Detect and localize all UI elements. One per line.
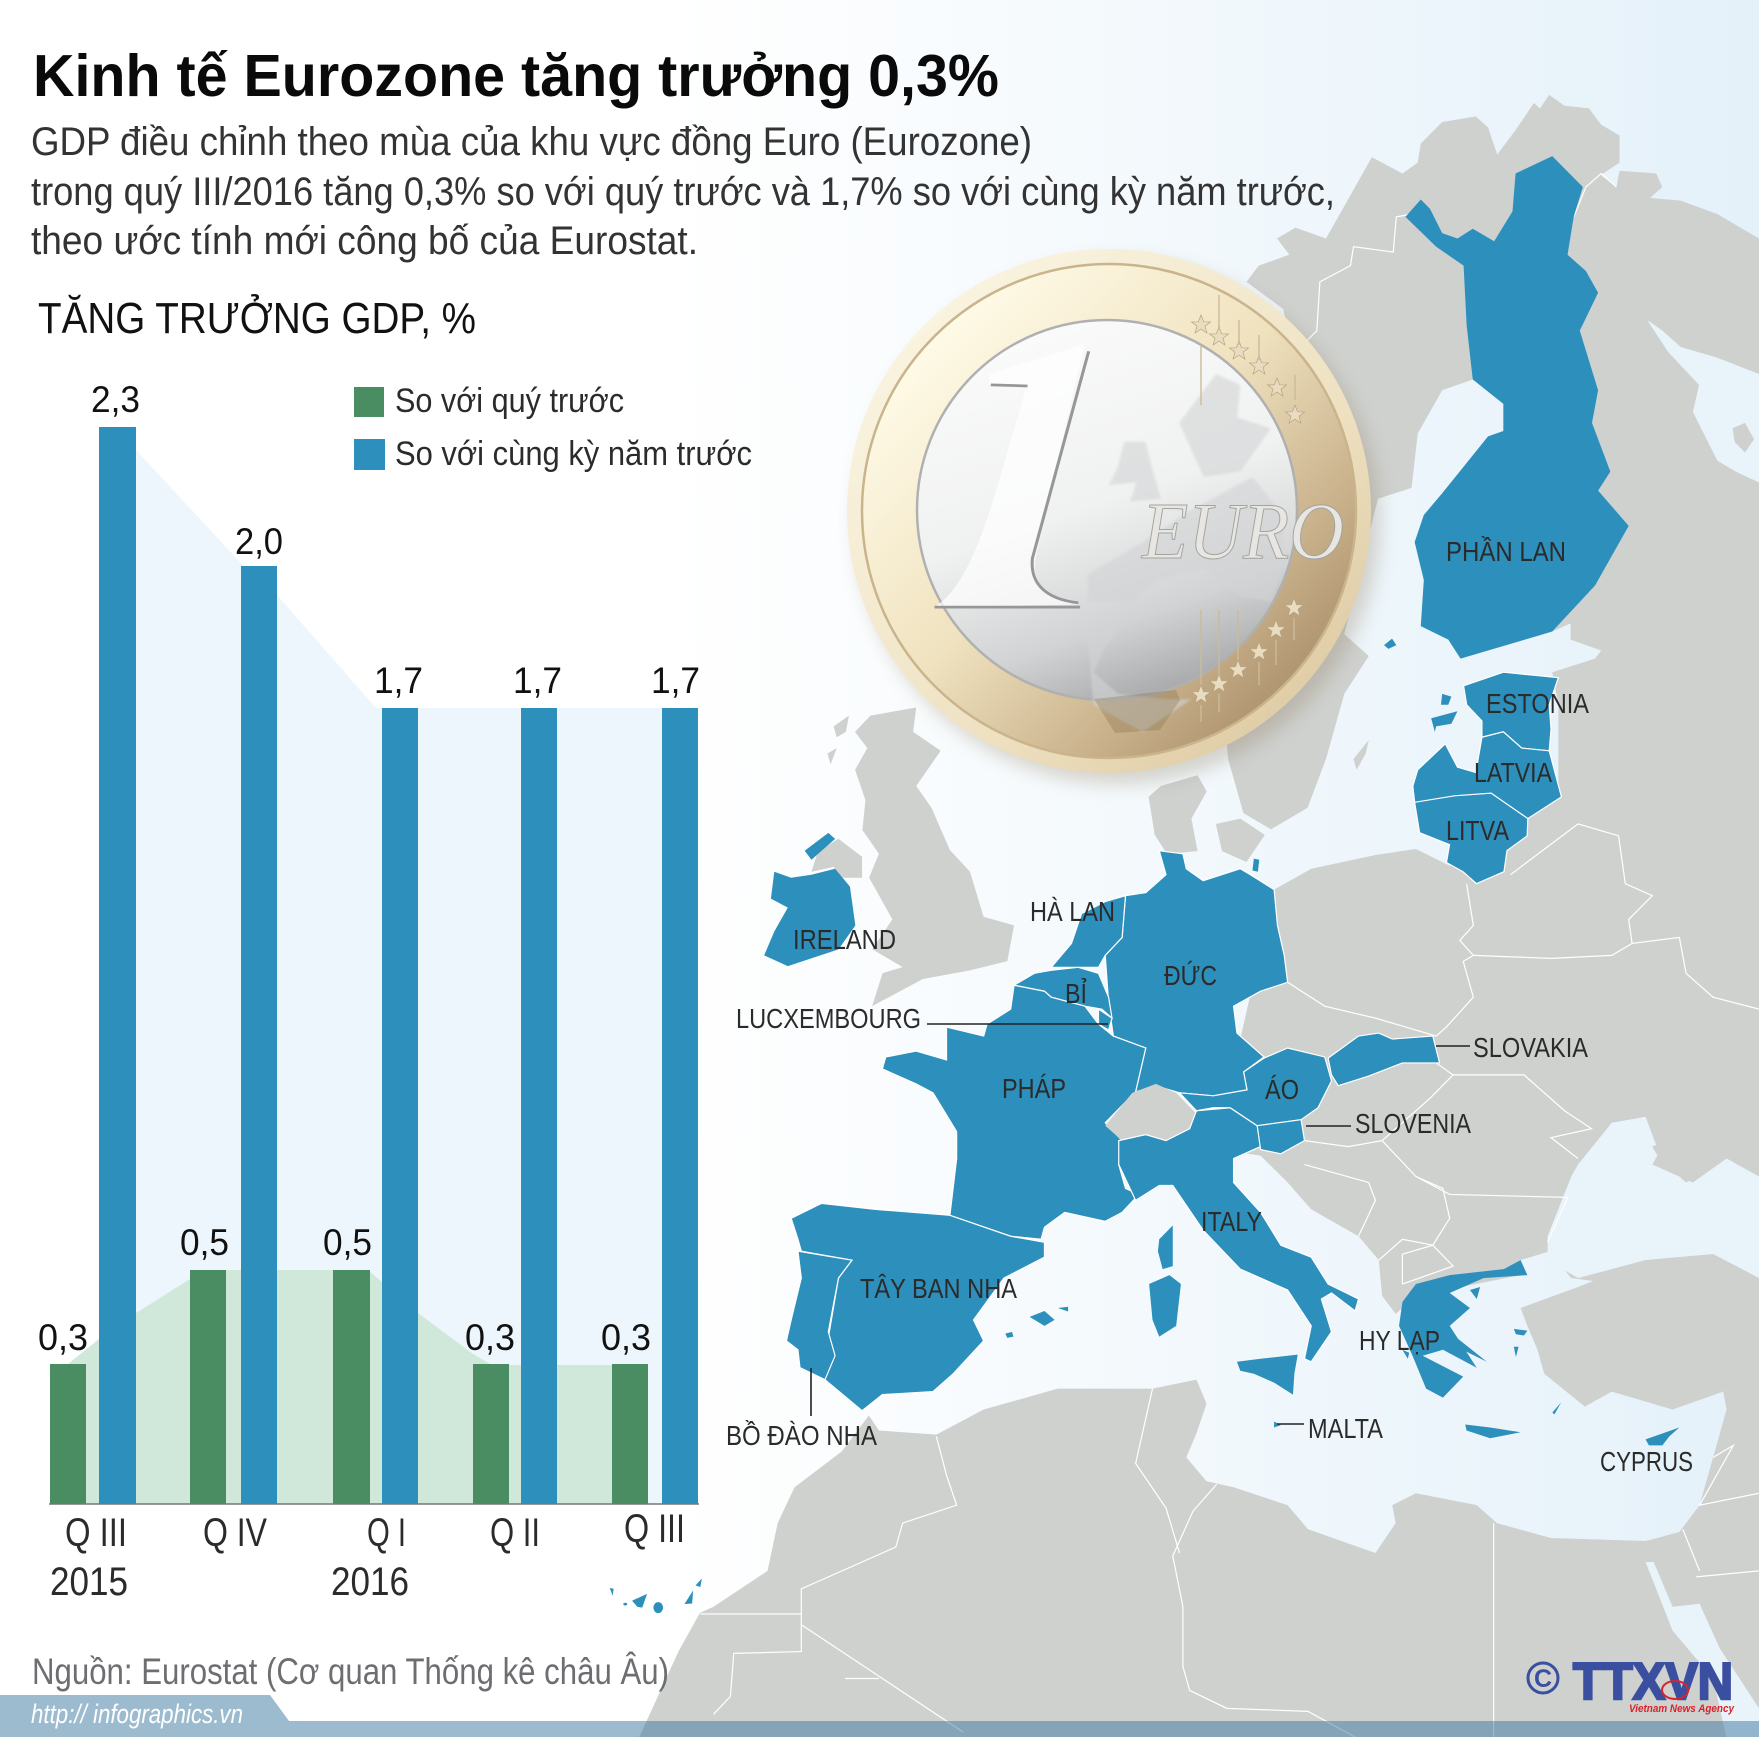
values: green bars: 0,3 [38, 1317, 88, 1358]
leader lines [811, 1024, 1470, 1424]
intro text: theo ước tính mới công bố của Eurostat. [31, 219, 698, 263]
green bars [50, 1270, 648, 1504]
bar chart: GDP growth [38, 379, 700, 1604]
label: Luxembourg: LUCXEMBOURG [736, 1003, 921, 1034]
values: blue bars: 1,7 [651, 660, 700, 701]
values: green bars: 0,3 [601, 1317, 651, 1358]
axis labels: Q I [367, 1511, 406, 1555]
coin: numeral 1 [935, 344, 1089, 607]
label: Netherlands: HÀ LAN [1030, 896, 1115, 927]
area: year on year trend [136, 450, 698, 1504]
logo: agency line: Vietnam News Agency [1629, 1703, 1735, 1715]
axis line [49, 1503, 699, 1505]
values: blue bars: 1,7 [513, 660, 562, 701]
label: Spain: TÂY BAN NHA [860, 1273, 1017, 1304]
legend [354, 382, 752, 473]
axis labels: 2016 [331, 1560, 409, 1604]
footer url: http:// infographics.vn [31, 1699, 243, 1729]
source note: Nguồn: Eurostat (Cơ quan Thống kê châu Âu) [32, 1651, 669, 1692]
label: Italy: ITALY [1201, 1206, 1262, 1237]
axis labels: Q II [490, 1511, 540, 1555]
axis labels: Q IV [203, 1511, 267, 1555]
map of Europe [610, 95, 1759, 1737]
logo: TTXVN [1528, 1653, 1735, 1715]
label: Finland: PHẦN LAN [1446, 536, 1566, 567]
label: Austria: ÁO [1265, 1074, 1299, 1105]
legend: quarter on quarter: So với quý trước [395, 382, 624, 420]
chart heading: TĂNG TRƯỞNG GDP, % [38, 292, 476, 343]
intro text: GDP điều chỉnh theo mùa của khu vực đồng Euro (Eurozone) [31, 120, 1032, 164]
label: Greece: HY LẠP [1359, 1325, 1440, 1356]
logo: wordmark: TTXVN [1573, 1653, 1733, 1711]
map: Eurozone countries (blue) [610, 156, 1679, 1613]
label: France: PHÁP [1002, 1073, 1066, 1104]
logo: copyright mark [1528, 1663, 1558, 1693]
coin: EURO lettering: EURO [1141, 488, 1344, 576]
label: Malta: MALTA [1308, 1413, 1383, 1444]
intro text: trong quý III/2016 tăng 0,3% so với quý trước và 1,7% so với cùng kỳ năm trước, [31, 170, 1335, 214]
axis labels: Q III [65, 1511, 127, 1555]
values: blue bars: 2,3 [91, 379, 140, 420]
label: Portugal: BỒ ĐÀO NHA [726, 1420, 877, 1451]
values: green bars: 0,3 [465, 1317, 515, 1358]
values: green bars: 0,5 [180, 1222, 229, 1263]
label: Latvia: LATVIA [1474, 757, 1552, 788]
values: blue bars: 2,0 [235, 521, 283, 562]
label: Slovakia: SLOVAKIA [1473, 1032, 1588, 1063]
coin: embossed map of Europe [1087, 374, 1283, 732]
coin: stars [1192, 295, 1304, 722]
title: Kinh tế Eurozone tăng trưởng 0,3% [33, 43, 999, 109]
label: Estonia: ESTONIA [1486, 688, 1589, 719]
values: blue bars: 1,7 [374, 660, 423, 701]
values: green bars [38, 1222, 651, 1358]
logo: copyright mark: C [1534, 1665, 1552, 1693]
Finland and Baltic states [1384, 156, 1629, 884]
axis labels: Q III [624, 1507, 685, 1551]
Western, central and southern Eurozone [764, 833, 1679, 1445]
values: green bars: 0,5 [323, 1222, 372, 1263]
axis labels [50, 1507, 685, 1604]
label: Lithuania: LITVA [1446, 815, 1509, 846]
label: Ireland: IRELAND [793, 924, 896, 955]
Canary Islands [610, 1578, 702, 1613]
legend: year on year: So với cùng kỳ năm trước [395, 435, 752, 473]
area: quarter on quarter trend [50, 1270, 612, 1504]
axis labels: 2015 [50, 1560, 128, 1604]
values: blue bars [91, 379, 700, 701]
map: northern land (Scandinavia, Russia, Britain, Denmark) [828, 95, 1759, 1006]
map: country labels and leader lines [726, 536, 1693, 1477]
blue bars [99, 427, 698, 1504]
label: Germany: ĐỨC [1164, 960, 1217, 991]
label: Slovenia: SLOVENIA [1355, 1108, 1471, 1139]
map: continental land, Africa and Middle East [639, 770, 1759, 1737]
icon: one euro coin [847, 249, 1380, 784]
coin: darker land shadow on the ring [1094, 690, 1180, 733]
intro text [31, 120, 1335, 263]
label: Belgium: BỈ [1065, 977, 1087, 1009]
label: Cyprus: CYPRUS [1600, 1446, 1693, 1477]
footer banner [0, 1695, 1759, 1737]
logo: swirl [1662, 1681, 1688, 1699]
